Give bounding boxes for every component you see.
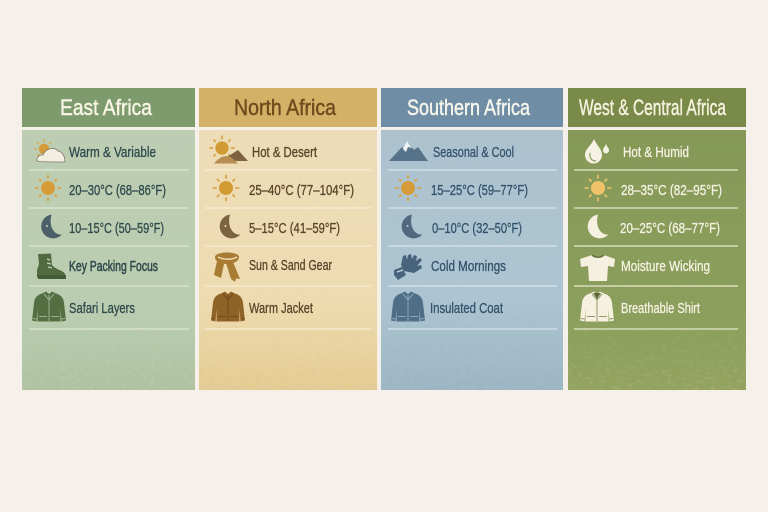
label: Warm & Variable: Warm & Variable xyxy=(69,145,156,161)
label: night temperature: 5–15°C (41–59°F) xyxy=(249,221,340,237)
heading: Southern Africa xyxy=(381,88,563,127)
label: daytime temperature: 28–35°C (82–95°F) xyxy=(621,183,722,199)
label: Hot & Desert: Hot & Desert xyxy=(252,145,317,161)
icon: boot xyxy=(37,254,66,279)
label: daytime temperature: 25–40°C (77–104°F) xyxy=(249,183,354,199)
label: night temperature: 0–10°C (32–50°F) xyxy=(432,221,522,237)
label: Key Packing Focus: Key Packing Focus xyxy=(69,259,158,275)
icon: moon xyxy=(220,214,240,238)
label: Sun & Sand Gear: Sun & Sand Gear xyxy=(249,258,332,274)
panel body: East Africa xyxy=(22,130,195,390)
icon: safari jacket xyxy=(32,292,66,322)
heading: North Africa xyxy=(199,88,377,127)
icon: sun xyxy=(586,176,610,200)
label: night temperature: 20–25°C (68–77°F) xyxy=(620,221,720,237)
icon: breathable shirt xyxy=(580,292,614,322)
icon: insulated coat xyxy=(391,292,425,322)
label: Moisture Wicking: Moisture Wicking xyxy=(621,259,710,275)
label: Seasonal & Cool: Seasonal & Cool xyxy=(433,145,514,161)
label: night temperature: 10–15°C (50–59°F) xyxy=(69,221,164,237)
label: Breathable Shirt: Breathable Shirt xyxy=(621,301,700,317)
label: Hot & Humid: Hot & Humid xyxy=(623,145,689,161)
icon: glove xyxy=(394,254,422,280)
label: daytime temperature: 20–30°C (68–86°F) xyxy=(69,183,166,199)
label: Cold Mornings: Cold Mornings xyxy=(431,259,506,275)
icon: snow-capped mountains xyxy=(389,141,428,161)
heading: West & Central Africa xyxy=(568,88,746,127)
panel: North Africa xyxy=(199,88,377,390)
label: Warm Jacket: Warm Jacket xyxy=(249,301,313,317)
icon: water drops xyxy=(585,139,609,164)
icon: t-shirt xyxy=(580,255,615,281)
panel: West & Central Africa xyxy=(568,88,746,390)
icon: sun xyxy=(214,176,238,200)
icon: sun xyxy=(36,176,60,200)
panel body: Southern Africa xyxy=(381,130,563,390)
icon: sun behind cloud xyxy=(35,140,65,162)
heading: North Africa: North Africa xyxy=(234,95,337,120)
icon: moon xyxy=(588,214,608,238)
panel body: North Africa xyxy=(199,130,377,390)
icon: scarf xyxy=(214,252,240,282)
label: daytime temperature: 15–25°C (59–77°F) xyxy=(431,183,528,199)
heading: East Africa: East Africa xyxy=(60,95,153,120)
icon: warm jacket xyxy=(211,292,245,322)
panel: Southern Africa xyxy=(381,88,563,390)
panel: East Africa xyxy=(22,88,195,390)
icon: moon xyxy=(402,214,422,238)
icon: moon xyxy=(41,214,62,238)
panel body: West & Central Africa xyxy=(568,130,746,390)
heading: East Africa xyxy=(22,88,195,127)
icon: sun xyxy=(396,176,420,200)
label: Safari Layers: Safari Layers xyxy=(69,301,135,317)
icon: sun over desert dunes xyxy=(210,136,248,164)
label: Insulated Coat: Insulated Coat xyxy=(430,301,503,317)
heading: Southern Africa: Southern Africa xyxy=(407,95,531,120)
